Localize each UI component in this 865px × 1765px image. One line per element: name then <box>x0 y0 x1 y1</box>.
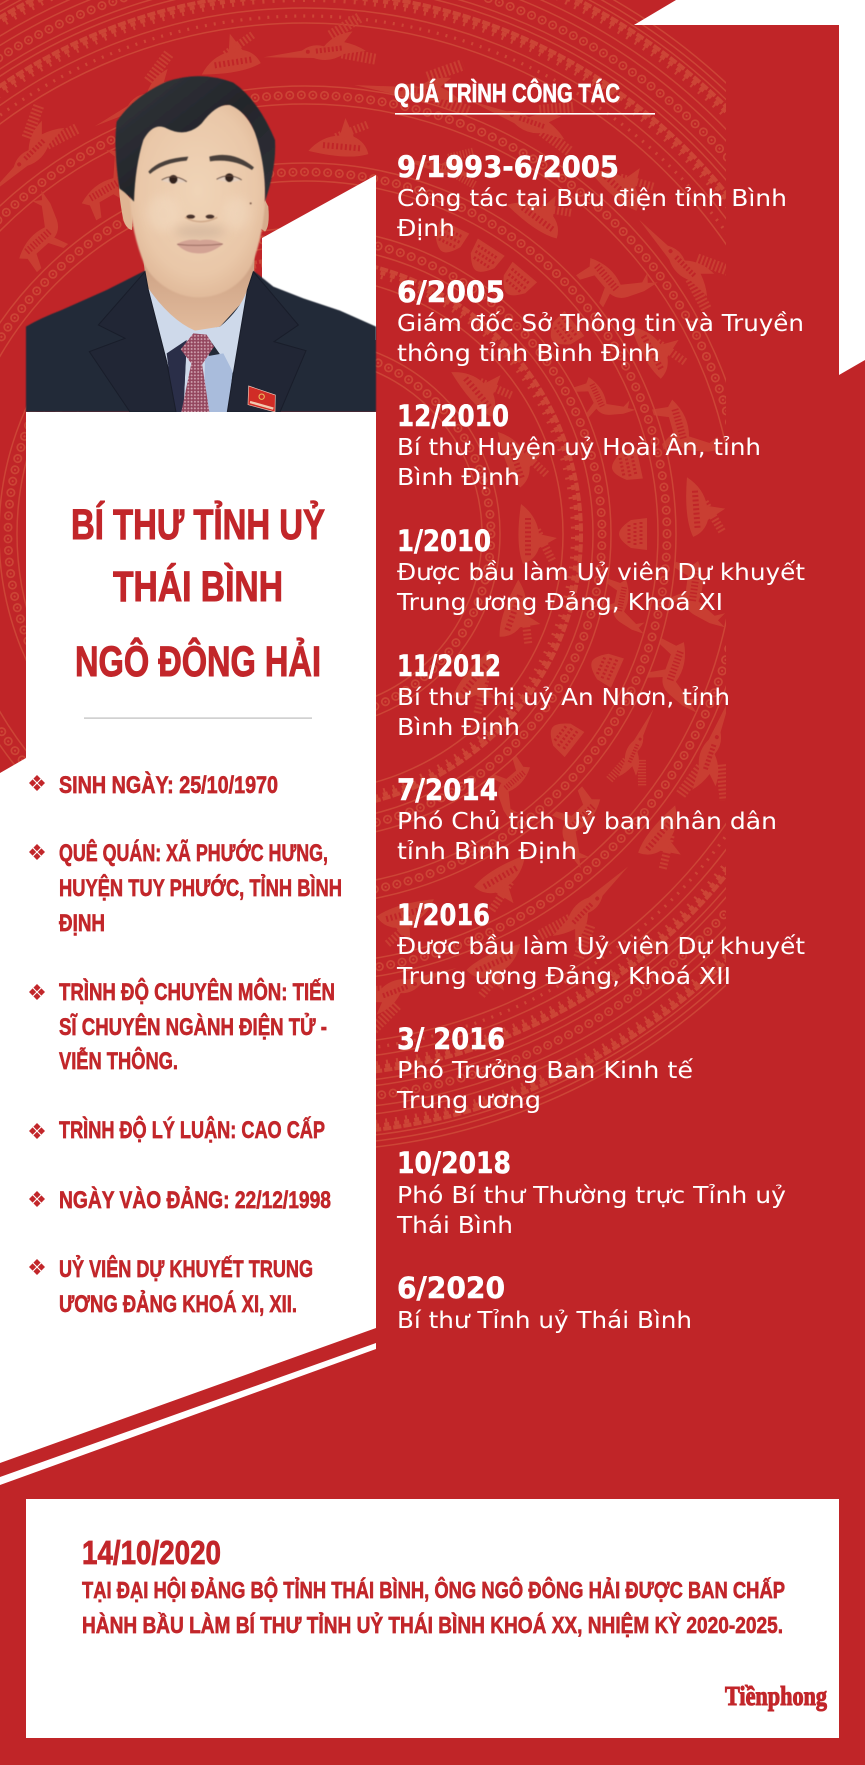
fact: political theory: TRÌNH ĐỘ LÝ LUẬN: CAO CẤP <box>59 1116 325 1144</box>
entry 6/2005: Giám đốc Sở Thông tin và Truyền <box>397 311 804 337</box>
entry 11/2012: Bí thư Thị uỷ An Nhơn, tỉnh <box>397 685 730 711</box>
entry 3/2016: Phó Trưởng Ban Kinh tế <box>397 1058 694 1084</box>
entry 12/2010: 12/2010 <box>397 399 509 433</box>
entry 3/2016 <box>396 1022 694 1114</box>
work history timeline <box>396 150 805 1334</box>
fact: central committee: UỶ VIÊN DỰ KHUYẾT TRUNG <box>59 1254 313 1283</box>
entry 6/2020: 6/2020 <box>397 1271 505 1305</box>
fact: political theory <box>29 1116 325 1144</box>
entry 12/2010: Bình Định <box>397 465 520 491</box>
fact: central committee <box>29 1254 313 1318</box>
entry 1/2016: 1/2016 <box>397 898 490 932</box>
fact: central committee: ƯƠNG ĐẢNG KHOÁ XI, XII. <box>59 1289 297 1318</box>
entry 9/1993-6/2005 <box>397 150 787 242</box>
entry 7/2014: 7/2014 <box>397 773 498 807</box>
fact: party entry date <box>29 1185 331 1214</box>
callout text <box>82 1575 785 1638</box>
entry 1/2016 <box>396 898 805 990</box>
white left panel <box>0 412 376 1463</box>
entry 10/2018: 10/2018 <box>397 1146 511 1180</box>
fact: birth date: SINH NGÀY: 25/10/1970 <box>59 771 278 799</box>
entry 7/2014: tỉnh Bình Định <box>397 839 577 865</box>
entry 9/1993-6/2005: Định <box>397 216 455 242</box>
entry 12/2010 <box>397 399 761 491</box>
personal facts list <box>29 771 342 1318</box>
fact: party entry date: NGÀY VÀO ĐẢNG: 22/12/1998 <box>59 1185 331 1214</box>
entry 7/2014: Phó Chủ tịch Uỷ ban nhân dân <box>397 809 777 835</box>
entry 11/2012 <box>397 649 730 741</box>
entry 6/2005 <box>397 275 804 367</box>
entry 9/1993-6/2005: Công tác tại Bưu điện tỉnh Bình <box>397 186 787 212</box>
entry 1/2010 <box>396 524 805 616</box>
fact: home town: HUYỆN TUY PHƯỚC, TỈNH BÌNH <box>59 873 342 902</box>
bottom callout panel <box>26 1499 839 1738</box>
entry 1/2010: Trung ương Đảng, Khoá XI <box>396 590 723 616</box>
entry 7/2014 <box>397 773 777 865</box>
fact: education: SĨ CHUYÊN NGÀNH ĐIỆN TỬ - <box>59 1012 327 1041</box>
entry 3/2016: Trung ương <box>396 1088 541 1114</box>
fact: education: TRÌNH ĐỘ CHUYÊN MÔN: TIẾN <box>59 978 335 1006</box>
title <box>71 500 325 686</box>
callout date: 14/10/2020 <box>82 1534 221 1571</box>
title: BÍ THƯ TỈNH UỶ <box>71 500 325 549</box>
entry 10/2018 <box>396 1146 786 1239</box>
logo: Tiền Phong: Tiềnphong <box>725 1681 827 1711</box>
entry 6/2020: Bí thư Tỉnh uỷ Thái Bình <box>397 1308 692 1334</box>
white diagonal stripe <box>0 1343 376 1485</box>
fact: education <box>29 978 335 1075</box>
background drum pattern <box>0 0 726 1148</box>
white triangle behind portrait <box>262 175 376 340</box>
fact: home town: QUÊ QUÁN: XÃ PHƯỚC HƯNG, <box>59 839 328 867</box>
entry 6/2020 <box>397 1271 692 1334</box>
entry 1/2010: Được bầu làm Uỷ viên Dự khuyết <box>397 560 805 586</box>
heading: work history: QUÁ TRÌNH CÔNG TÁC <box>394 78 620 108</box>
fact: home town <box>29 839 342 937</box>
title: NGÔ ĐÔNG HẢI <box>75 637 321 686</box>
entry 1/2010: 1/2010 <box>397 524 491 558</box>
entry 6/2005: thông tỉnh Bình Định <box>397 341 660 367</box>
entry 3/2016: 3/ 2016 <box>397 1022 505 1056</box>
title: THÁI BÌNH <box>113 563 283 611</box>
entry 11/2012: 11/2012 <box>397 649 501 683</box>
portrait photo <box>26 76 376 412</box>
entry 11/2012: Bình Định <box>397 715 520 741</box>
entry 1/2016: Trung ương Đảng, Khoá XII <box>396 964 731 990</box>
entry 1/2016: Được bầu làm Uỷ viên Dự khuyết <box>397 934 805 960</box>
fact: education: VIỄN THÔNG. <box>59 1046 178 1075</box>
entry 9/1993-6/2005: 9/1993-6/2005 <box>397 150 619 184</box>
white corner shape, top right <box>634 0 865 375</box>
entry 10/2018: Phó Bí thư Thường trực Tỉnh uỷ <box>397 1183 786 1209</box>
entry 6/2005: 6/2005 <box>397 275 505 309</box>
entry 12/2010: Bí thư Huyện uỷ Hoài Ân, tỉnh <box>397 433 761 461</box>
fact: home town: ĐỊNH <box>59 910 105 937</box>
entry 10/2018: Thái Bình <box>396 1213 513 1239</box>
title divider <box>84 718 312 719</box>
